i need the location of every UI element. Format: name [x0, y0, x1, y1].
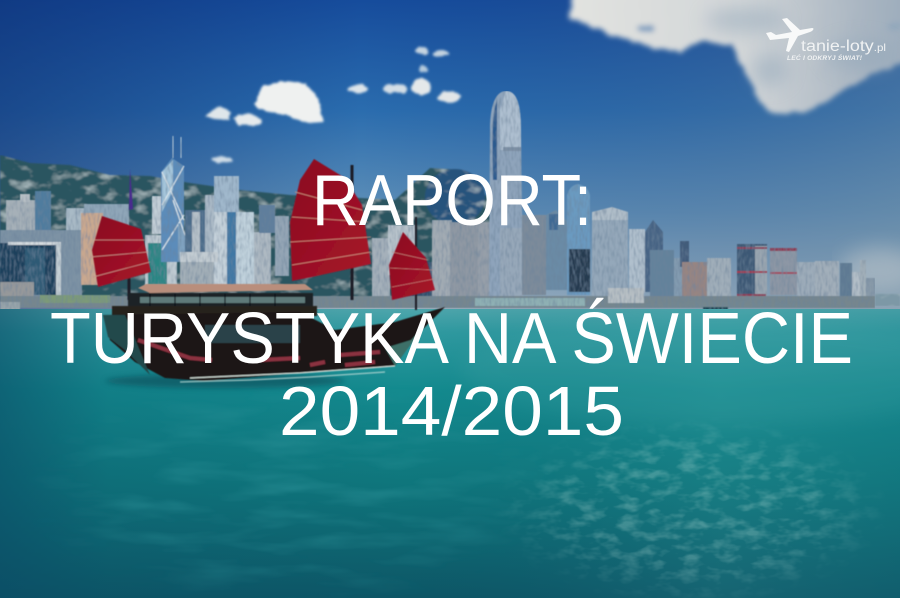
- clouds: [205, 0, 900, 292]
- masts: [129, 165, 416, 310]
- sail: left: [90, 216, 151, 287]
- background: sea: [0, 309, 900, 598]
- cabin roof: [138, 284, 313, 293]
- logo: [766, 18, 886, 62]
- buildings left: [0, 191, 215, 302]
- cloud: small group: [210, 48, 460, 164]
- cloud: centre left: [205, 81, 324, 125]
- logo tagline: LEĆ I ODKRYJ ŚWIAT!: [787, 53, 863, 62]
- sail: right: [389, 232, 435, 300]
- cloud: large top right: [570, 0, 900, 116]
- cloud: horizon haze: [840, 248, 900, 292]
- title line: TURYSTYKA NA ŚWIECIE: TURYSTYKA NA ŚWIECIE: [50, 298, 853, 379]
- icon: plane: [766, 18, 813, 52]
- sail: centre: [290, 159, 371, 281]
- water: light patch lower right: [490, 415, 890, 598]
- junk boat: [90, 159, 445, 382]
- cloud shading: [705, 8, 895, 86]
- title line: RAPORT: RAPORT:: [312, 161, 592, 241]
- hull: [103, 307, 445, 381]
- waterfront: [0, 288, 875, 312]
- water: light wash upper right: [460, 315, 900, 425]
- title: [50, 161, 853, 450]
- background: sky: [0, 0, 900, 312]
- wake: [180, 372, 385, 382]
- skyline: [0, 91, 875, 312]
- cabin: [112, 293, 317, 316]
- buildings centre: [372, 220, 490, 300]
- water: dark ripples: [20, 370, 560, 598]
- tower: Bank of China: [152, 136, 192, 262]
- boat shadow: [105, 374, 345, 388]
- tower: IFC2: [489, 91, 523, 300]
- hills: [0, 155, 900, 306]
- logo name: tanie-loty .pl: [801, 38, 886, 55]
- buildings right of tower: [522, 184, 875, 303]
- title line: years: 2014/2015: [279, 372, 624, 450]
- buildings centre left: [180, 176, 289, 286]
- flag: [129, 169, 133, 210]
